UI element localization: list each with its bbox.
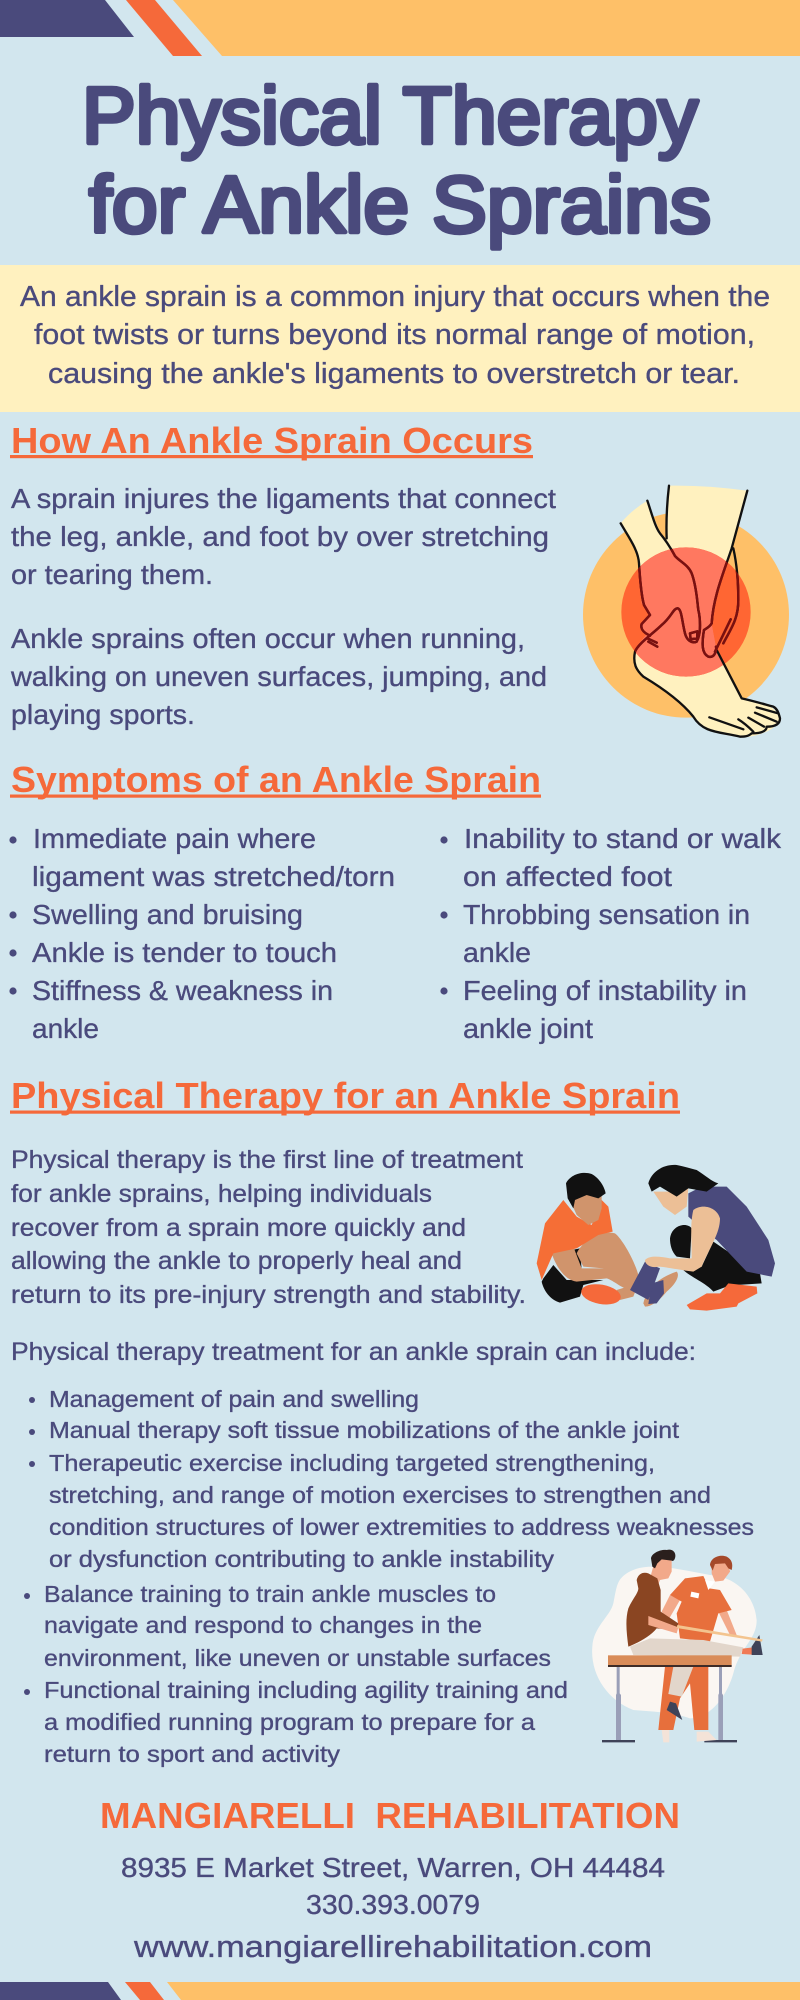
text block: physical therapy intro [11, 1146, 696, 1366]
top decorative banner [0, 0, 800, 56]
list: symptoms right column [440, 823, 782, 1044]
icon: injured ankle held by hands [583, 486, 789, 737]
list: symptoms right column: Throbbing sensation in [463, 899, 750, 930]
text block: physical therapy intro: return to its pre-injury strength and stability. [11, 1281, 526, 1309]
text block: physical therapy intro: recover from a sprain more quickly and [11, 1214, 466, 1242]
list: treatment items, upper: or dysfunction contributing to ankle instability [49, 1546, 554, 1572]
text block: physical therapy intro: Physical therapy is the first line of treatment [11, 1146, 523, 1174]
heading: physical therapy: Physical Therapy for an Ankle Sprain [11, 1075, 680, 1116]
list: symptoms left column: Stiffness & weakness in [32, 975, 333, 1006]
list: symptoms left column: Immediate pain where [33, 823, 316, 854]
list: treatment items, lower [24, 1581, 568, 1767]
list: treatment items, lower: environment, like uneven or unstable surfaces [44, 1645, 551, 1671]
title: Physical Therapy [82, 71, 698, 160]
text block: how a sprain occurs: the leg, ankle, and foot by over stretching [11, 521, 549, 552]
footer: clinic contact [100, 1795, 680, 1964]
text block: how a sprain occurs [10, 483, 556, 730]
list: symptoms right column: Inability to stand or walk [464, 823, 782, 854]
list: symptoms left column [9, 823, 395, 1044]
list: treatment items, upper: stretching, and range of motion exercises to strengthen and [49, 1482, 711, 1508]
list: treatment items, lower: a modified running program to prepare for a [44, 1709, 536, 1735]
text block: how a sprain occurs: A sprain injures the ligaments that connect [11, 483, 556, 514]
bottom decorative banner [0, 1982, 800, 2000]
list: treatment items, upper: Therapeutic exercise including targeted strengthening, [49, 1450, 655, 1476]
footer: clinic contact: MANGIARELLI REHABILITATION [100, 1795, 680, 1836]
title: for Ankle Sprains [89, 160, 711, 249]
text block: how a sprain occurs: playing sports. [11, 699, 195, 730]
list: symptoms right column: Feeling of instability in [463, 975, 747, 1006]
illustration: therapist stretching patient's leg on table [592, 1550, 763, 1742]
list: treatment items, lower: Balance training to train ankle muscles to [44, 1581, 496, 1607]
list: symptoms left column: ligament was stretched/torn [32, 861, 395, 892]
footer: clinic contact: www.mangiarellirehabilitation.com [133, 1929, 652, 1964]
list: symptoms right column: on affected foot [463, 861, 672, 892]
footer: clinic contact: 8935 E Market Street, Warren, OH 44484 [121, 1852, 665, 1883]
text block: how a sprain occurs: or tearing them. [11, 559, 213, 590]
list: treatment items, lower: navigate and respond to changes in the [44, 1612, 482, 1638]
text block: how a sprain occurs: Ankle sprains often occur when running, [11, 623, 525, 654]
panel: intro definition: An ankle sprain is a common injury that occurs when the [20, 281, 770, 313]
list: symptoms left column: ankle [32, 1013, 99, 1044]
list: treatment items, lower: Functional training including agility training and [44, 1677, 568, 1703]
list: treatment items, upper: Manual therapy soft tissue mobilizations of the ankle joint [49, 1417, 679, 1443]
footer: clinic contact: 330.393.0079 [306, 1889, 480, 1920]
panel: intro definition: causing the ankle's ligaments to overstretch or tear. [48, 358, 740, 390]
illustration: therapist wrapping patient's ankle [537, 1165, 775, 1311]
panel: intro definition: foot twists or turns beyond its normal range of motion, [34, 319, 755, 351]
list: treatment items, upper: condition structures of lower extremities to address weaknesses [49, 1514, 754, 1540]
text block: how a sprain occurs: walking on uneven surfaces, jumping, and [10, 661, 547, 692]
heading: symptoms: Symptoms of an Ankle Sprain [11, 759, 541, 800]
text block: physical therapy intro: allowing the ankle to properly heal and [11, 1247, 462, 1275]
list: symptoms left column: Ankle is tender to touch [32, 937, 337, 968]
heading: how an ankle sprain occurs: How An Ankle Sprain Occurs [11, 420, 533, 461]
list: treatment items, upper [29, 1386, 754, 1572]
list: treatment items, lower: return to sport and activity [44, 1741, 340, 1767]
list: symptoms right column: ankle joint [463, 1013, 593, 1044]
panel: intro definition [0, 265, 800, 412]
text block: physical therapy intro: for ankle sprains, helping individuals [11, 1180, 432, 1208]
list: symptoms left column: Swelling and bruising [32, 899, 303, 930]
title [82, 71, 711, 249]
list: symptoms right column: ankle [463, 937, 531, 968]
list: treatment items, upper: Management of pain and swelling [49, 1386, 419, 1412]
text block: physical therapy intro: Physical therapy treatment for an ankle sprain can include: [11, 1338, 696, 1366]
